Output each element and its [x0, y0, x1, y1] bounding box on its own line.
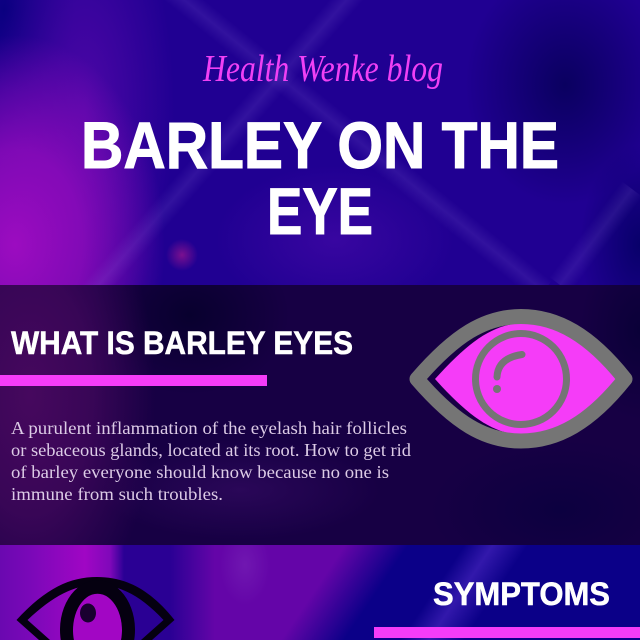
title: [81, 108, 559, 245]
description text: A purulent inflammation of the eyelash hair follicles: [11, 418, 407, 438]
description text: of barley everyone should know because no one is: [11, 462, 389, 482]
symptoms underline bar: [374, 627, 640, 638]
icon: magenta eye: [410, 309, 632, 448]
description text: immune from such troubles.: [11, 484, 223, 504]
heading underline bar: [0, 375, 267, 386]
icon: black eye: [16, 577, 174, 640]
description text: [11, 418, 411, 504]
heading: symptoms: SYMPTOMS: [433, 576, 610, 612]
heading: what is barley eyes: WHAT IS BARLEY EYES: [11, 325, 353, 361]
description text: or sebaceous glands, located at its root. How to get rid: [11, 440, 411, 460]
